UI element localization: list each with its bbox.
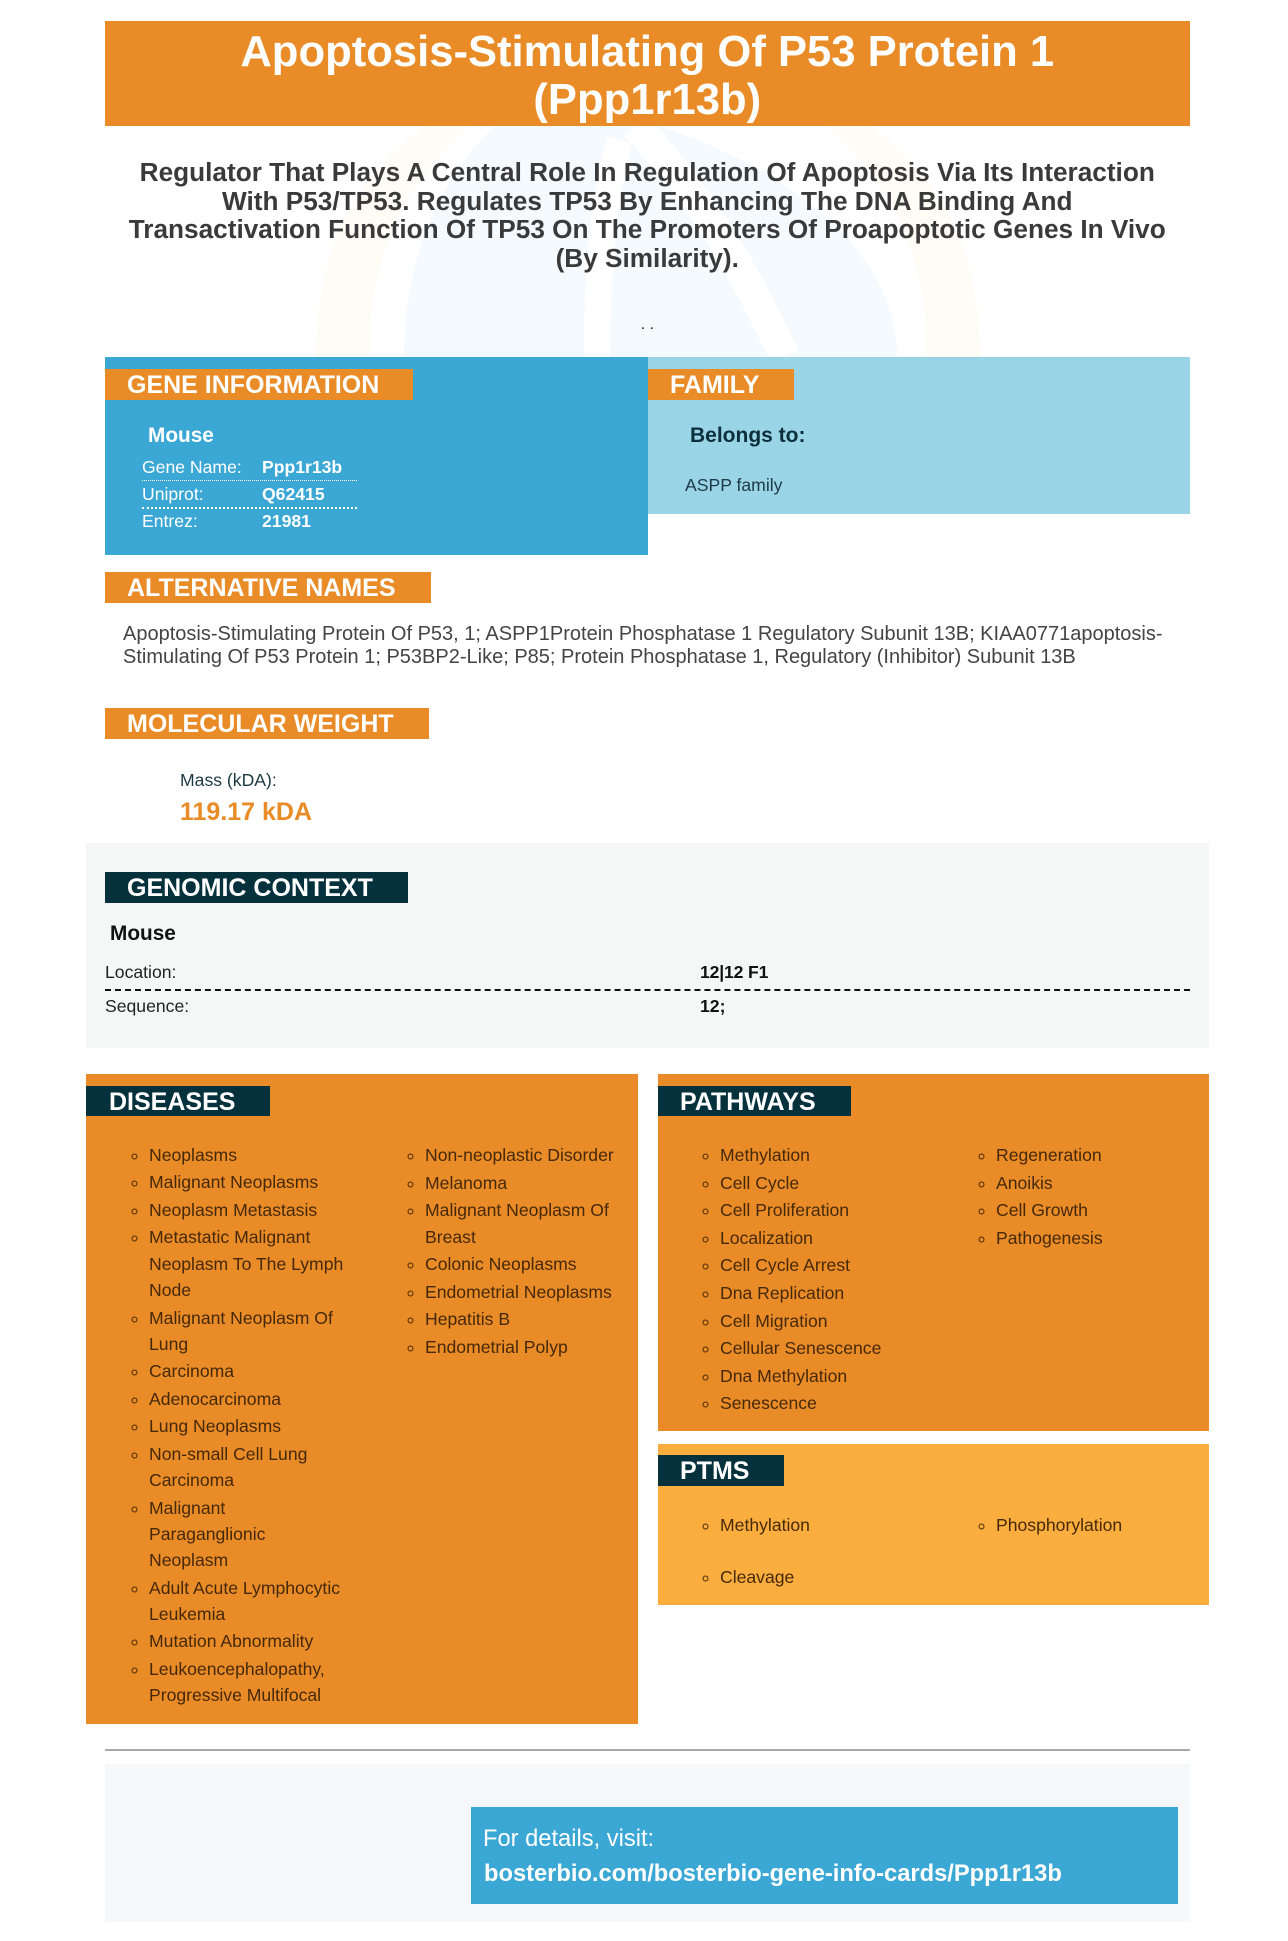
mass label: Mass (kDA): <box>180 770 277 790</box>
title banner: Apoptosis-Stimulating Of P53 Protein 1 <box>240 28 1054 76</box>
diseases list column 1: Adenocarcinoma <box>149 1389 281 1409</box>
heading: molecular weight: MOLECULAR WEIGHT <box>127 710 394 738</box>
diseases list column 1: Adult Acute Lymphocytic Leukemia <box>149 1578 340 1624</box>
diseases list column 2: Melanoma <box>425 1173 507 1193</box>
pathways list column 1: Cellular Senescence <box>720 1338 881 1358</box>
pathways list column 1: Methylation <box>720 1145 810 1165</box>
species label: Mouse <box>110 922 176 944</box>
alternative names text: Apoptosis-Stimulating Protein Of P53, 1; ASPP1Protein Phosphatase 1 Regulatory Subunit 13B; KIAA0771apoptosis- <box>123 623 1163 645</box>
diseases list column 2: Endometrial Neoplasms <box>425 1282 612 1302</box>
panel: family <box>648 357 1190 514</box>
gene name row: Ppp1r13b <box>262 457 342 477</box>
species label: Mouse <box>148 424 214 447</box>
panel: genomic context <box>86 843 1209 1048</box>
diseases list column 1: Malignant Neoplasm Of Lung <box>149 1308 333 1354</box>
title banner: (Ppp1r13b) <box>533 76 761 124</box>
uniprot row <box>142 482 357 509</box>
diseases list column 1: Neoplasms <box>149 1145 237 1165</box>
pathways list column 1 <box>702 1145 881 1413</box>
pathways list column 1: Cell Cycle Arrest <box>720 1255 850 1275</box>
pathways list column 1: Senescence <box>720 1393 817 1413</box>
heading: gene information: GENE INFORMATION <box>127 371 379 399</box>
footer divider <box>105 1749 1190 1751</box>
background watermark logo <box>316 126 980 357</box>
row divider <box>105 989 1190 991</box>
entrez row: 21981 <box>262 511 311 531</box>
belongs to label: Belongs to: <box>690 424 806 447</box>
pathways list column 1: Cell Cycle <box>720 1173 799 1193</box>
pathways list column 1: Dna Methylation <box>720 1366 847 1386</box>
diseases list column 2: Non-neoplastic Disorder <box>425 1145 614 1165</box>
pathways list column 2 <box>978 1145 1103 1248</box>
ptms list column 1 <box>702 1515 810 1587</box>
visit label: For details, visit: <box>483 1826 654 1852</box>
title banner <box>105 21 1190 126</box>
diseases list column 2: Hepatitis B <box>425 1309 510 1329</box>
ptms list column 1: Methylation <box>720 1515 810 1535</box>
panel: diseases <box>86 1074 638 1724</box>
heading: ptms: PTMS <box>680 1457 749 1485</box>
diseases list column 1: Malignant Paraganglionic Neoplasm <box>149 1498 265 1570</box>
gene name row <box>142 456 357 481</box>
diseases list column 1: Mutation Abnormality <box>149 1631 313 1651</box>
uniprot row: Uniprot: <box>142 484 204 504</box>
heading: family: FAMILY <box>670 371 759 399</box>
alternative names text: Stimulating Of P53 Protein 1; P53BP2-Like; P85; Protein Phosphatase 1, Regulatory (Inhibitor) Subunit 13B <box>123 646 1076 668</box>
sequence label: Sequence: <box>105 996 189 1016</box>
ptms list column 1: Cleavage <box>720 1567 794 1587</box>
separator dots: . . <box>641 316 654 333</box>
description text: With P53/TP53. Regulates TP53 By Enhancing The DNA Binding And <box>222 186 1072 216</box>
panel: gene information <box>105 357 648 555</box>
heading: pathways: PATHWAYS <box>680 1088 816 1116</box>
heading: pathways <box>658 1086 850 1116</box>
diseases list column 1: Neoplasm Metastasis <box>149 1200 317 1220</box>
diseases list column 1: Lung Neoplasms <box>149 1416 281 1436</box>
location label: Location: <box>105 962 176 982</box>
description text <box>129 157 1166 273</box>
pathways list column 2: Cell Growth <box>996 1200 1088 1220</box>
family name: ASPP family <box>685 475 782 495</box>
diseases list column 1: Carcinoma <box>149 1361 234 1381</box>
diseases list column 2 <box>408 1145 614 1357</box>
mass value: 119.17 kDA <box>180 798 312 826</box>
diseases list column 1: Metastatic Malignant Neoplasm To The Lymph Node <box>149 1227 343 1300</box>
heading: diseases: DISEASES <box>109 1088 235 1116</box>
diseases list column 1: Non-small Cell Lung Carcinoma <box>149 1444 307 1490</box>
description text: Regulator That Plays A Central Role In Regulation Of Apoptosis Via Its Interaction <box>140 157 1155 187</box>
pathways list column 1: Cell Migration <box>720 1311 828 1331</box>
location value: 12|12 F1 <box>700 962 768 982</box>
diseases list column 1: Malignant Neoplasms <box>149 1172 318 1192</box>
footer panel <box>105 1764 1190 1922</box>
sequence value: 12; <box>700 996 725 1016</box>
call to action box <box>471 1807 1178 1904</box>
pathways list column 1: Cell Proliferation <box>720 1200 849 1220</box>
pathways list column 2: Pathogenesis <box>996 1228 1103 1248</box>
diseases list column 2: Colonic Neoplasms <box>425 1254 577 1274</box>
diseases list column 2: Malignant Neoplasm Of Breast <box>425 1200 609 1247</box>
url: bosterbio.com/bosterbio-gene-info-cards/Ppp1r13b <box>484 1861 1062 1887</box>
description text: (By Similarity). <box>556 243 739 273</box>
panel: ptms <box>658 1444 1209 1605</box>
alternative names text <box>123 623 1163 668</box>
uniprot row: Q62415 <box>262 484 325 504</box>
heading: family <box>648 369 794 400</box>
entrez row: Entrez: <box>142 511 198 531</box>
diseases list column 2: Endometrial Polyp <box>425 1337 568 1357</box>
diseases list column 1 <box>132 1145 343 1705</box>
pathways list column 2: Regeneration <box>996 1145 1102 1165</box>
heading: diseases <box>86 1086 270 1116</box>
heading: genomic context: GENOMIC CONTEXT <box>127 874 373 902</box>
pathways list column 1: Localization <box>720 1228 813 1248</box>
diseases list column 1: Leukoencephalopathy, Progressive Multifocal <box>149 1659 325 1705</box>
panel: pathways <box>658 1074 1209 1431</box>
pathways list column 2: Anoikis <box>996 1173 1053 1193</box>
entrez row <box>142 511 311 531</box>
heading: alternative names: ALTERNATIVE NAMES <box>127 574 396 602</box>
description text: Transactivation Function Of TP53 On The Promoters Of Proapoptotic Genes In Vivo <box>129 214 1166 244</box>
gene name row: Gene Name: <box>142 457 242 477</box>
ptms list column 2: Phosphorylation <box>996 1515 1122 1535</box>
pathways list column 1: Dna Replication <box>720 1283 844 1303</box>
heading: ptms <box>658 1455 784 1486</box>
